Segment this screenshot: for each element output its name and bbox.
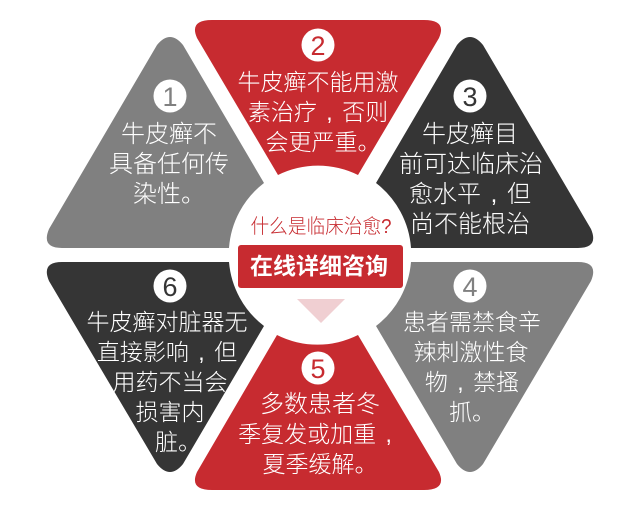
- panel 5: red bottom segment: 季复发或加重 ,: [238, 421, 392, 447]
- panel 6: dark inverted triangle: 牛皮癣对脏器无: [86, 309, 248, 335]
- panel 4: grey inverted triangle: [376, 262, 593, 472]
- panel 2: red top segment: 牛皮癣不能用激: [238, 69, 398, 95]
- panel 4: grey inverted triangle: 患者需禁食辛: [403, 309, 541, 335]
- center button: [238, 245, 403, 288]
- panel 2: red top segment: [195, 20, 441, 175]
- panel 2: red top segment: 2: [310, 31, 326, 61]
- panel 1: grey triangle: 染性。: [133, 181, 205, 208]
- panel 2: red top segment: 素治疗 , 否则: [248, 99, 388, 125]
- panel 2: red top segment: 会更严重。: [266, 129, 380, 155]
- panel 4: grey inverted triangle: 抓。: [449, 399, 495, 425]
- panel 6: dark inverted triangle: 损害内: [136, 399, 204, 425]
- panel 1: grey triangle: 牛皮癣不: [121, 121, 217, 148]
- center question text: 什么是临床治愈?: [250, 215, 392, 238]
- panel 4: grey inverted triangle: 4: [462, 272, 478, 302]
- panel 1: grey triangle: 1: [162, 82, 178, 112]
- panel 6: dark inverted triangle: 脏。: [155, 429, 201, 455]
- panel 1: grey triangle: 具备任何传: [109, 151, 229, 178]
- panel 5: red bottom segment: 多数患者冬: [260, 391, 380, 418]
- panel 5: red bottom segment: [195, 335, 441, 490]
- panel 6: dark inverted triangle: 直接影响 , 但: [97, 339, 237, 365]
- panel 3: dark triangle: 前可达临床治: [399, 151, 543, 178]
- arrow: pointing down: [297, 299, 345, 323]
- panel 1: grey triangle: [47, 37, 264, 248]
- panel 5: red bottom segment: 夏季缓解。: [262, 451, 378, 477]
- panel 4: grey inverted triangle: 辣刺激性食: [414, 339, 528, 365]
- panel 6: dark inverted triangle: [47, 262, 264, 472]
- panel 3: dark triangle: 愈水平 , 但: [409, 181, 531, 208]
- panel 6: dark inverted triangle: 用药不当会: [112, 369, 228, 395]
- panel 5: red bottom segment: 5: [310, 354, 326, 384]
- panel 3: dark triangle: 尚不能根治: [410, 211, 530, 238]
- panel 3: dark triangle: 牛皮癣目: [422, 121, 518, 148]
- panel 4: grey inverted triangle: 物 , 禁搔: [425, 369, 519, 395]
- panel 3: dark triangle: [376, 37, 593, 248]
- center button: 在线详细咨询: [250, 253, 388, 279]
- panel 3: dark triangle: 3: [462, 82, 478, 112]
- panel 6: dark inverted triangle: 6: [162, 272, 178, 302]
